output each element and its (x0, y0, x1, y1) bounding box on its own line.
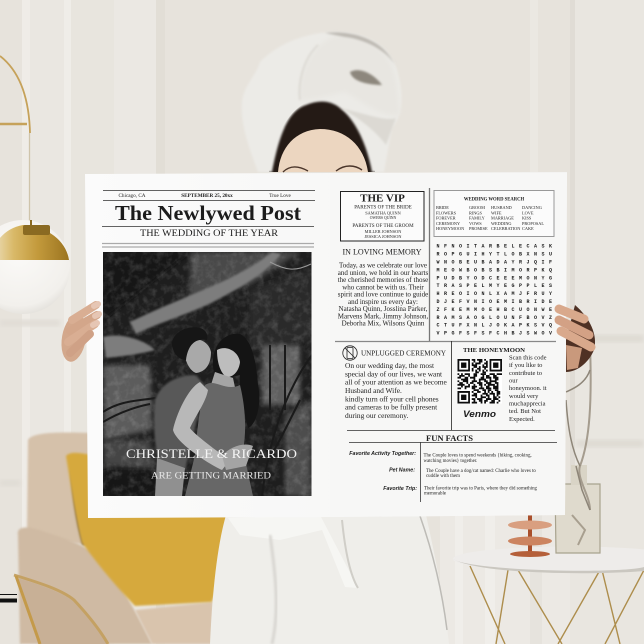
word search letter grid: VPGFSFSFCHBJSWOV (436, 331, 557, 337)
word search letter grid: ROPGUIHYTLOBXNSU (436, 252, 557, 258)
fact: favorite activity (349, 451, 532, 464)
woman (173, 334, 259, 496)
panel: the VIP: SAMATHA QUINN (365, 210, 401, 216)
panel: unplugged ceremony (345, 350, 448, 420)
masthead (102, 190, 315, 247)
panel: word search list: PROPOSAL (522, 221, 544, 226)
fact: pet name: The Couple have a dog/cat named: Charlie who loves to (426, 469, 536, 474)
fact: favorite trip (383, 486, 538, 496)
panel: in loving memory: Deborha Mix, Wilsons Quinn (342, 320, 425, 328)
panel: the honeymoon (458, 347, 547, 423)
panel: unplugged ceremony: all of your attention as we become (345, 378, 448, 387)
panel: in loving memory: Marvens Mark, Jimmy Johnson, (338, 312, 428, 320)
panel: fun facts: FUN FACTS (426, 433, 473, 443)
divider: lower section (335, 340, 556, 342)
word search letter grid: TRASPELMYEGPPLES (436, 283, 557, 289)
word search letter grid: PUDBYODCEEEMONYG (436, 275, 557, 281)
panel: in loving memory: and inspire us every day: (348, 298, 418, 306)
panel: word search list: CEREMONY (436, 221, 460, 226)
word search letter grid: HREOIONLXAMJFRUY (436, 291, 557, 297)
glass vase with branch (555, 345, 600, 553)
fact: favorite activity: The Couple loves to spend weekends {hiking, cooking, (424, 454, 532, 458)
panel: in loving memory: the cherished memories of those (338, 276, 428, 284)
panel: unplugged ceremony: special day of our lives, we want (345, 369, 443, 378)
towel wrap (242, 32, 401, 172)
photo caption: ARE GETTING MARRIED (151, 470, 272, 480)
panel: the VIP (340, 192, 424, 241)
face and hair (269, 98, 375, 172)
panel: in loving memory: Natasha Quinn, Josslina Parker, (339, 305, 428, 313)
panel: word search list: FAMILY (469, 216, 485, 221)
fact: pet name: cuddle with them (426, 474, 460, 479)
panel: unplugged ceremony: during our ceremony. (345, 411, 408, 420)
panel: in loving memory: IN LOVING MEMORY (342, 248, 422, 256)
panel: word search list: FOREVER (436, 216, 456, 221)
word search letter grid: MEOWBOBSBIMORPKQ (436, 267, 557, 273)
QR code (458, 359, 502, 404)
black edge lines at left (0, 594, 17, 602)
panel: the VIP: MILLER JOHNSON (365, 229, 401, 234)
divider: word search column (428, 188, 430, 341)
panel: word search list: CELEBRATION (491, 226, 520, 231)
panel: word search list: RINGS (469, 210, 483, 215)
panel: the VIP: THE VIP (360, 192, 405, 204)
panel: in loving memory: Today, as we celebrate our love (339, 262, 427, 270)
panel: fun facts (347, 430, 557, 502)
left hand (58, 304, 99, 364)
headline: THE WEDDING OF THE YEAR (140, 229, 279, 239)
word search letter grid (436, 244, 557, 337)
dark background branches (103, 345, 312, 496)
panel: the honeymoon: contribute to (509, 370, 542, 377)
word search letter grid: WNOBEUBADAYRJQIF (436, 260, 557, 266)
icon: no phones (343, 346, 357, 360)
side table (453, 546, 644, 644)
panel: word search list: KISS (522, 216, 532, 221)
panel: the VIP: JESSICA JOHNSON (365, 234, 401, 239)
panel: the VIP: PARENTS OF THE GROOM (352, 223, 414, 229)
panel: the honeymoon: if you like to (509, 362, 542, 369)
panel: word search list (434, 190, 554, 236)
panel: word search list: WIFE (491, 210, 502, 215)
Venmo label: Venmo (463, 409, 496, 420)
panel: unplugged ceremony: kindly turn off your cell phones (345, 394, 439, 403)
word search letter grid: ZFKEMMOEHBCUONWE (436, 307, 557, 313)
fact: pet name: Pet Name: (389, 468, 415, 474)
newspaper (85, 172, 567, 518)
panel: word search list: BRIDE (436, 205, 449, 210)
couple photograph (103, 252, 312, 496)
masthead: Chicago, CA (118, 193, 146, 199)
panel: the honeymoon: would very (509, 393, 539, 400)
panel: the honeymoon: muchapprecia (509, 400, 546, 408)
panel: in loving memory: and union, we hold in our hearts (338, 269, 428, 277)
panel: the honeymoon: ted. But Not (509, 408, 541, 415)
fact: favorite activity: watching movies} together. (424, 459, 477, 464)
fact: favorite trip: memorable (424, 492, 446, 496)
word search letter grid: CTUFXNLJOKAPKSVQ (436, 323, 557, 329)
word search letter grid: RAMSAOGLOUNFBOVZ (436, 315, 557, 321)
panel: unplugged ceremony: and cameras to be fully present (345, 403, 438, 412)
fact: favorite activity: Favorite Activity Together: (349, 451, 416, 457)
armchair (14, 433, 213, 644)
panel: word search list: DANCING (522, 205, 542, 210)
word search letter grid: DJEFVNIOEMIBRIDE (436, 299, 557, 305)
right hand (559, 305, 595, 372)
copper candle holder (508, 514, 552, 557)
panel: the honeymoon: Scan this code (509, 354, 547, 362)
masthead: SEPTEMBER 25, 20xx (181, 193, 233, 199)
panel: the honeymoon: THE HONEYMOON (463, 347, 525, 354)
panel: word search list: FLOWERS (436, 210, 457, 215)
panel: in loving memory: who cannot be with us. Their (342, 283, 424, 291)
panel: word search list: VOWS (469, 221, 482, 226)
panel: word search list: GROOM (469, 205, 485, 210)
panel: the VIP: PARENTS OF THE BRIDE (354, 204, 412, 210)
panel: word search list: CAKE (522, 226, 534, 231)
panel: in loving memory (338, 248, 428, 328)
panel: word search list: PROMISE (469, 226, 488, 231)
mustard cushion (66, 453, 229, 606)
panel: the honeymoon: honeymoon. it (509, 385, 547, 392)
pendant lamp globe (0, 220, 70, 314)
panel: unplugged ceremony: On our wedding day, the most (345, 361, 435, 370)
panel: word search list: HONEYMOON (436, 226, 464, 231)
panel: word search list: LOVE (522, 210, 534, 215)
panel: the VIP: OWERS QUINN (370, 216, 396, 220)
word search letter grid: NFNOITARBELECASK (436, 244, 557, 250)
masthead: True Love (269, 193, 291, 199)
panel: word search list: MARRIAGE (491, 216, 514, 221)
tree branch (130, 252, 281, 334)
fact: pet name (389, 468, 536, 479)
fact: favorite trip: Favorite Trip: (383, 486, 417, 492)
bathrobe (210, 515, 449, 644)
photo background foliage (103, 252, 312, 496)
panel: word search list: WEDDING (491, 221, 512, 226)
gold lamp arm (0, 56, 30, 222)
newspaper name: The Newlywed Post (115, 201, 301, 225)
panel: the honeymoon: our (509, 378, 518, 384)
newspaper sheet (85, 172, 567, 518)
panel: unplugged ceremony: UNPLUGGED CEREMONY (361, 350, 446, 358)
fact: favorite trip: Their favorite trip was to Paris, where they did something (424, 486, 538, 491)
panel: the honeymoon: Expected. (509, 416, 535, 423)
panel: unplugged ceremony: Husband and Wife. (345, 386, 402, 395)
panel: word search list: HUSBAND (491, 205, 512, 210)
panel: in loving memory: spirit and love continue to guide (338, 290, 428, 298)
man (154, 327, 211, 496)
panel: word search list: WEDDING WORD SEARCH (464, 198, 525, 202)
couple names: CHRISTELLE & RICARDO (126, 447, 297, 461)
